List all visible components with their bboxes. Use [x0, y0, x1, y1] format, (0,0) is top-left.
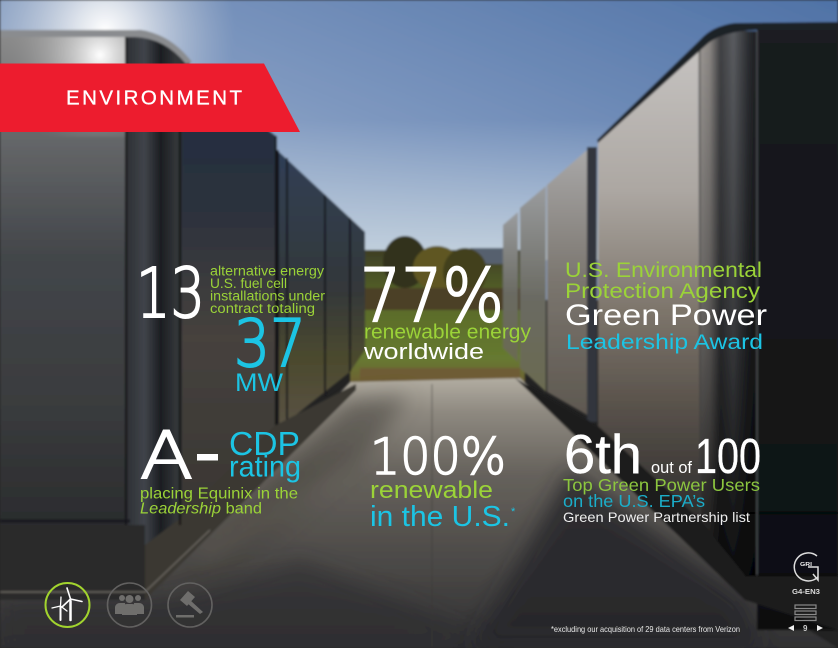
stat: 6th out of 100: Top Green Power Users: [563, 475, 760, 495]
stat: 6th out of 100: out of: [651, 458, 692, 477]
right base: [515, 378, 838, 630]
stat: 100% renewable in the U.S.: *: [511, 506, 516, 518]
stat: A- CDP rating: Leadership band: [140, 500, 262, 518]
right dark face: [757, 30, 838, 630]
stat: 6th out of 100: Green Power Partnership list: [563, 509, 750, 525]
right panel: [598, 50, 700, 520]
stat: 13 fuel cell installations, 37 MW: 37: [234, 307, 306, 382]
stat description: [210, 264, 326, 316]
stat: 77% renewable energy: 77%: [360, 254, 504, 339]
stat: 77% renewable energy: renewable energy: [364, 322, 531, 344]
section banner: ENVIRONMENT: [66, 86, 242, 110]
stat: 6th out of 100: [563, 423, 761, 525]
right top cap: [597, 22, 838, 143]
left base: [0, 525, 145, 600]
stat: 100% renewable in the U.S.: 100%: [370, 428, 506, 486]
stat description: alternative energy: [210, 264, 324, 278]
stat: 100% renewable in the U.S.: [370, 428, 516, 533]
stat: EPA Green Power Leadership Award: U.S. Environmental: [565, 259, 762, 282]
stat: 6th out of 100: 6th: [564, 423, 642, 485]
icon: people group: [108, 583, 152, 627]
stat: A- CDP rating: A: [140, 419, 193, 494]
icon: GRI badge: GRI: [800, 562, 813, 568]
left top cap: [0, 30, 192, 64]
icon: wind turbines, active: [46, 583, 90, 627]
ground: [0, 378, 838, 648]
page navigation: [788, 624, 823, 633]
left building side panel: [178, 62, 276, 520]
stat: 77% renewable energy: worldwide: [363, 339, 484, 364]
left building side unit far: [277, 150, 365, 430]
left front face: [0, 37, 125, 525]
icon: GRI badge: [794, 553, 818, 581]
section banner: [0, 64, 300, 132]
footnote: *excluding our acquisition of 29 data centers from Verizon: [551, 624, 740, 634]
icon: gavel: [168, 583, 212, 627]
stat: A- CDP rating: [140, 419, 301, 518]
stat: 13 fuel cell installations, 37 MW: MW: [235, 369, 283, 397]
right corner column: [698, 31, 757, 600]
stat description: contract totaling: [210, 301, 315, 316]
stat: EPA Green Power Leadership Award: Green Power: [565, 299, 767, 332]
stat: 6th out of 100: 100: [695, 430, 761, 484]
page navigation: 9: [803, 624, 808, 633]
stat description: installations under: [210, 288, 326, 304]
stat: 100% renewable in the U.S.: in the U.S.: [370, 501, 510, 533]
stat: EPA Green Power Leadership Award: [565, 259, 767, 354]
GRI code: G4-EN3: [792, 589, 820, 596]
sky: [0, 0, 838, 300]
stat: A- CDP rating: placing Equinix in the: [140, 486, 298, 502]
stat: 13 fuel cell installations, 37 MW: 13: [136, 254, 205, 334]
stat description: U.S. fuel cell: [210, 276, 287, 291]
icon: menu: [795, 605, 816, 620]
right building far units: [503, 212, 518, 362]
left corner column: [125, 30, 190, 592]
stat: A- CDP rating: CDP: [229, 425, 300, 462]
stat: EPA Green Power Leadership Award: Leadership Award: [566, 331, 763, 354]
ground shadows and joints: [0, 384, 760, 648]
stat: 6th out of 100: on the U.S. EPA’s: [563, 491, 705, 511]
stat: A- CDP rating: rating: [229, 450, 301, 484]
grass and trees: [350, 236, 525, 385]
stat: 13 fuel cell installations, 37 MW: [136, 254, 326, 397]
stat: 100% renewable in the U.S.: renewable: [370, 477, 493, 504]
stat: EPA Green Power Leadership Award: Protection Agency: [565, 280, 761, 303]
